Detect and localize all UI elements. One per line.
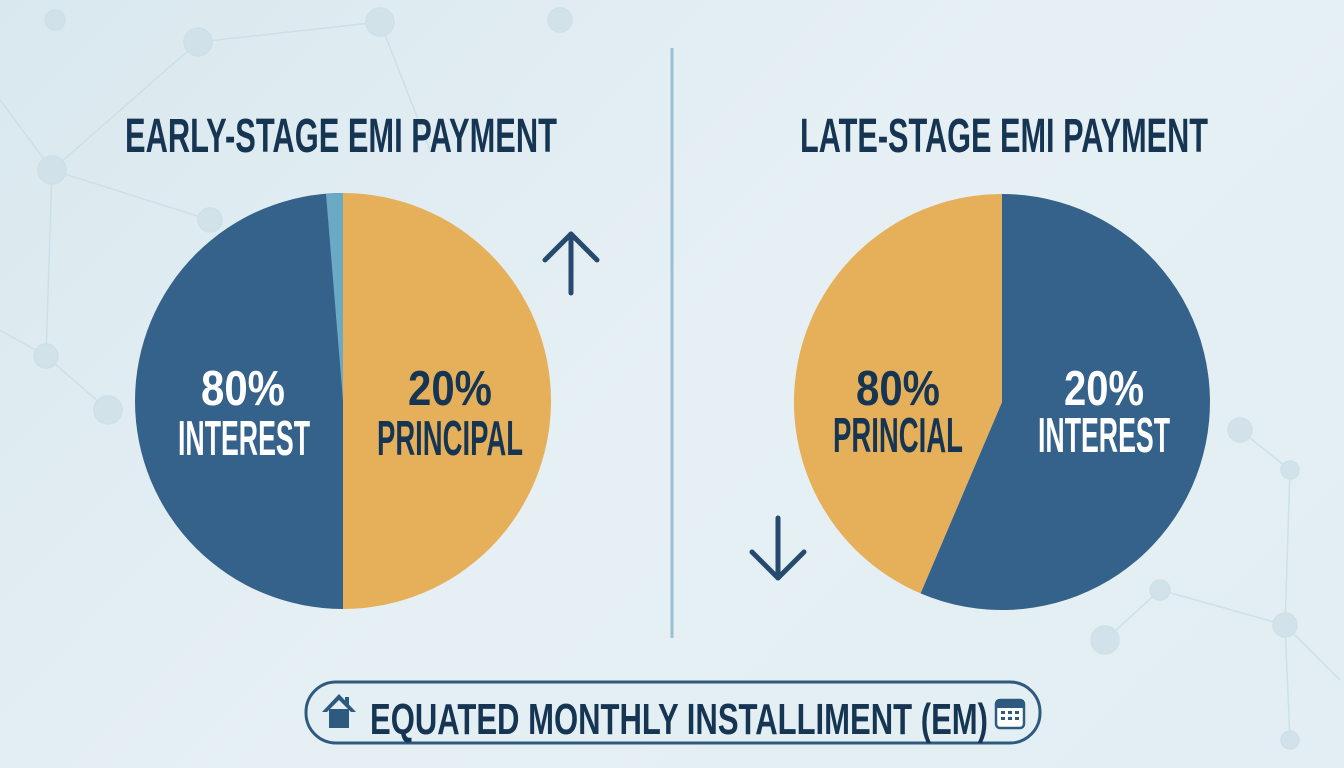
arrow: up [545,234,597,293]
label: 20% principal [377,362,523,466]
icon: house [322,694,356,728]
pie chart: late stage [794,194,1210,610]
label: 20% principal: PRINCIPAL [377,412,523,466]
label: 20% interest: 20% [1064,362,1144,416]
title: early stage: EARLY-STAGE EMI PAYMENT [125,110,557,163]
label: 80% principal: 80% [856,362,940,416]
banner [306,682,1040,744]
label: 20% interest: INTEREST [1038,409,1170,463]
label: 20% principal: 20% [408,362,492,416]
pie chart: early stage [135,193,551,609]
label: 80% interest [178,362,310,466]
label: 20% interest [1038,362,1170,463]
label: 80% interest: 80% [201,362,285,416]
arrow: down [752,518,804,578]
divider [670,48,674,638]
label: 80% principal: PRINCIAL [833,409,963,463]
banner text: EQUATED MONTHLY INSTALLIMENT (EM) [370,695,988,744]
label: 80% principal [833,362,963,463]
label: 80% interest: INTEREST [178,412,310,466]
icon: calendar [996,700,1024,728]
